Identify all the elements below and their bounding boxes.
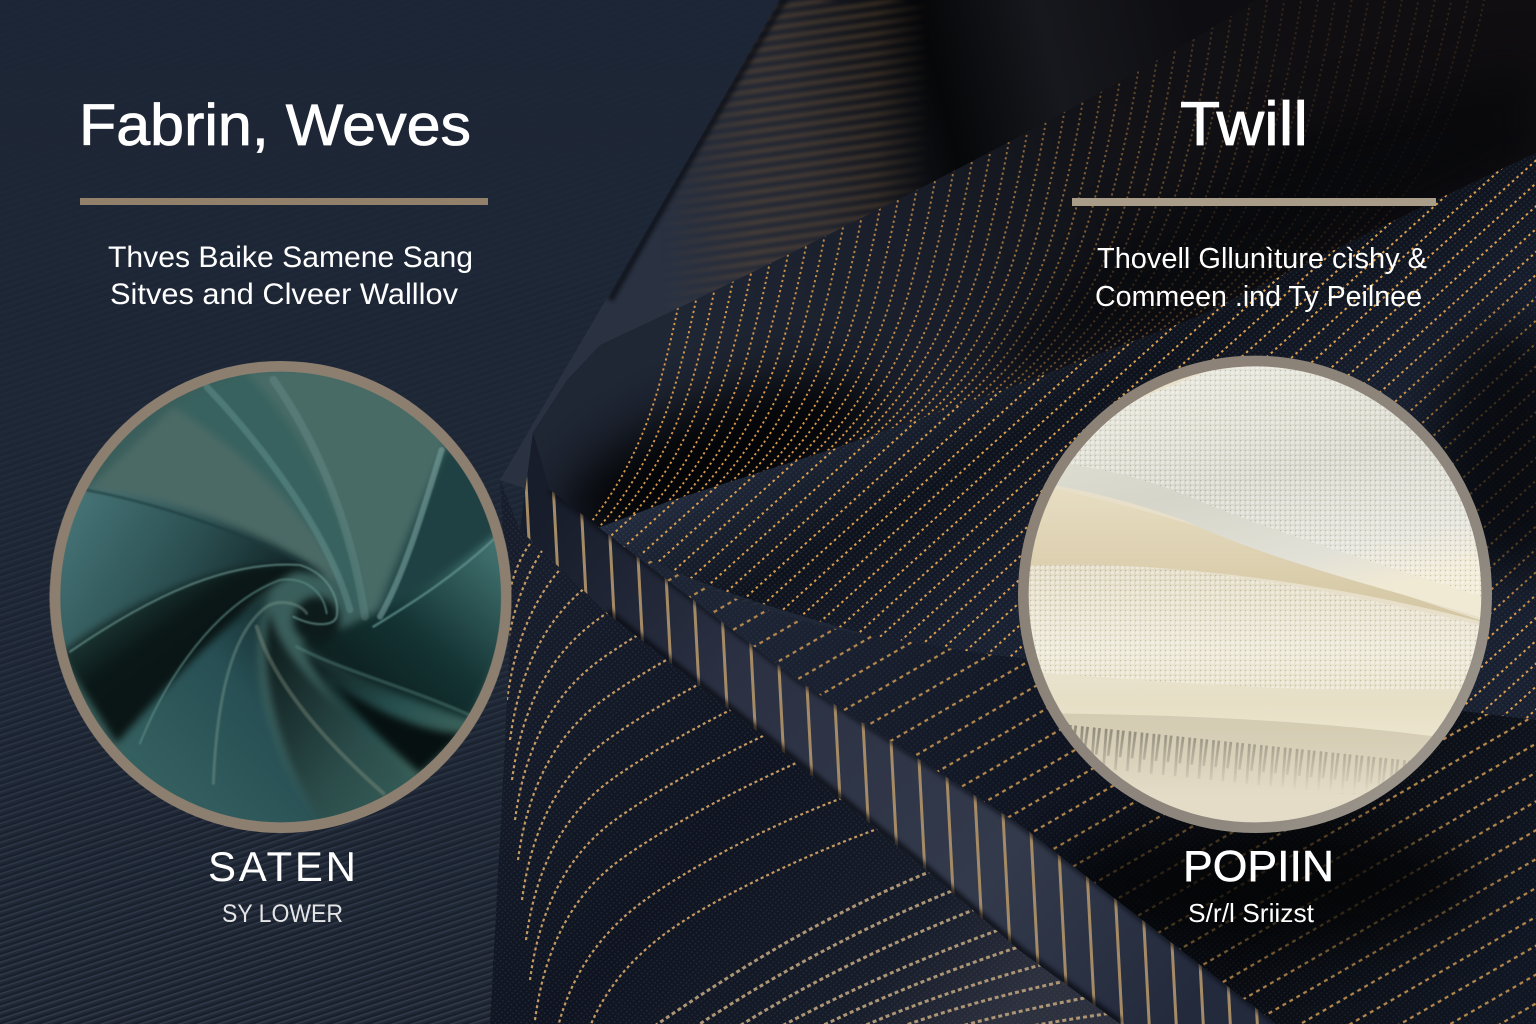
circle: satin swatch bbox=[40, 350, 530, 840]
description: left: Thves Baike Samene Sang bbox=[108, 241, 473, 274]
divider rule: right bbox=[1072, 198, 1436, 206]
shadow under top fold bbox=[1030, 490, 1480, 622]
label: SATEN bbox=[208, 843, 356, 928]
circle: poplin swatch bbox=[1010, 350, 1500, 843]
label: SATEN: SATEN bbox=[208, 843, 356, 890]
description: right bbox=[1095, 243, 1427, 313]
panel: smooth diagonal band with vertical stripes bbox=[520, 430, 1300, 1024]
label: POPIIN: POPIIN bbox=[1183, 842, 1334, 891]
title: Fabrin, Weves: Fabrin, Weves bbox=[79, 93, 471, 158]
divider rule: left bbox=[80, 198, 488, 205]
panel: lower-left bundle with curved stripes bbox=[490, 481, 1120, 1024]
description: left bbox=[108, 241, 473, 311]
panel: blue pinstripe fold bbox=[580, 140, 1536, 740]
sublabel: SY LOWER: SY LOWER bbox=[222, 900, 343, 928]
description: right: Thovell Gllunìture cìshy & bbox=[1097, 243, 1427, 275]
middle cream fold bbox=[1010, 562, 1500, 737]
panel: back fold of pinstripe fabric bbox=[500, 0, 1256, 488]
top fold bbox=[1056, 366, 1482, 617]
satin highlights bbox=[70, 380, 497, 793]
heading: Twill: Twill bbox=[1180, 90, 1308, 159]
panel: lower-right twill with tan stripes bbox=[620, 540, 1536, 1024]
satin ring bbox=[55, 366, 506, 828]
background: dark navy twill cloth bbox=[0, 526, 758, 1024]
description: left: Sitves and Clveer Walllov bbox=[110, 278, 458, 311]
fringe bbox=[1062, 714, 1432, 794]
satin folds bbox=[60, 372, 502, 822]
description: right: Commeen .ind Ty Peilnee bbox=[1095, 281, 1422, 313]
poplin ring bbox=[1023, 361, 1487, 828]
panel: middle fan fold with gold pinstripes bbox=[533, 0, 1536, 528]
label: POPIIN bbox=[1183, 842, 1334, 928]
sublabel: S/r/l Sriizst: S/r/l Sriizst bbox=[1188, 898, 1315, 928]
